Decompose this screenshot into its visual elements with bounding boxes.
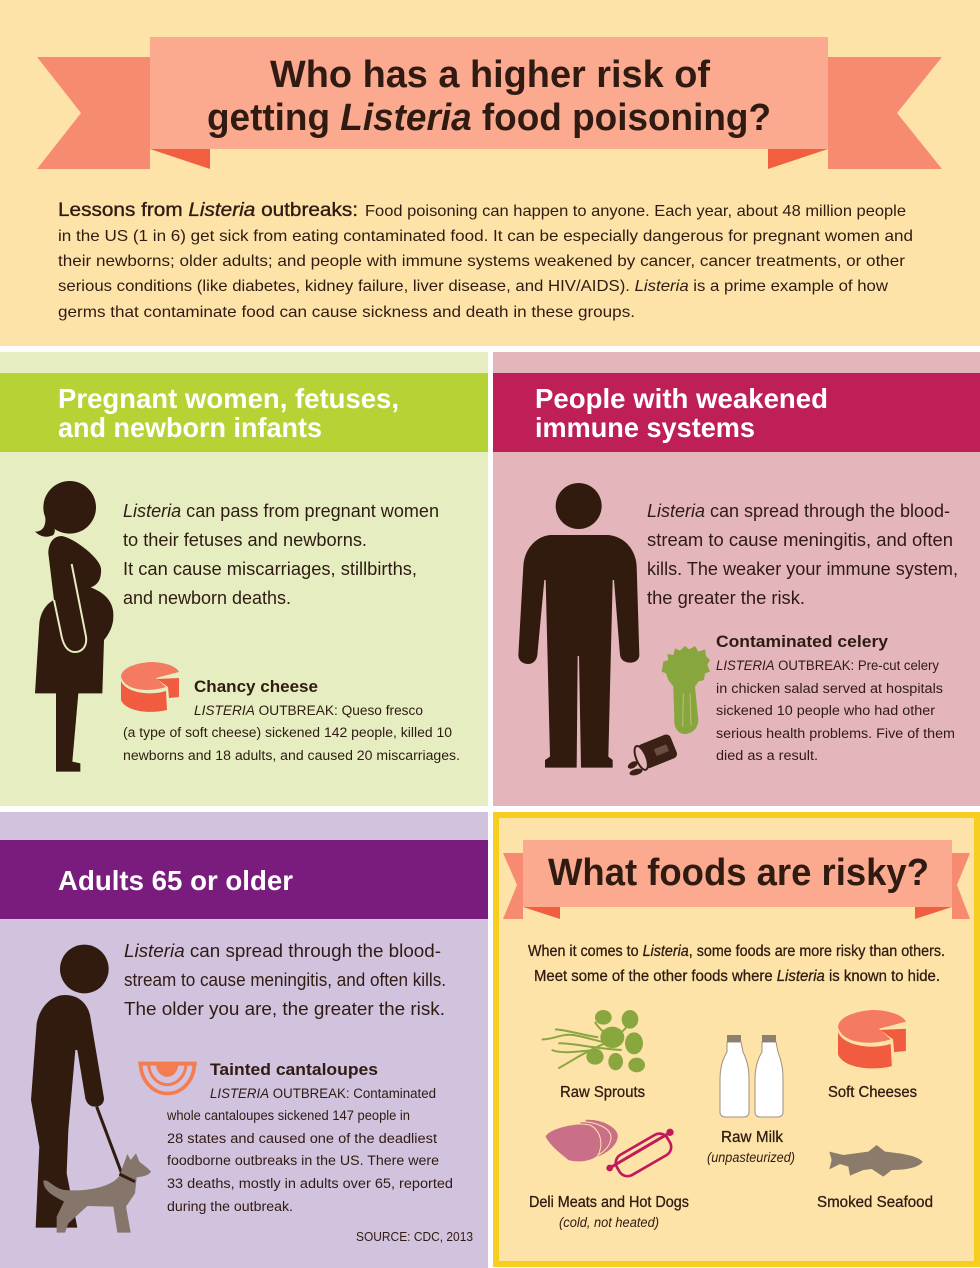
callout: chancy cheese: (a type of soft cheese) sickened 142 people, killed 10 — [123, 725, 452, 740]
text: foods intro — [528, 943, 945, 985]
food: soft cheeses — [828, 1010, 917, 1101]
heading: pregnant women: Pregnant women, fetuses, — [58, 383, 399, 414]
text: older adult risk: The older you are, the greater the risk. — [124, 999, 445, 1019]
panel: weakened immune systems — [493, 352, 980, 806]
callout: tainted cantaloupes: whole cantaloupes sickened 147 people in — [166, 1108, 410, 1123]
callout: tainted cantaloupes: during the outbreak. — [167, 1199, 293, 1214]
callout: tainted cantaloupes: Tainted cantaloupes — [210, 1060, 378, 1079]
heading: immune systems: immune systems — [535, 412, 755, 443]
food: deli meats and hot dogs — [529, 1119, 689, 1230]
text: older adult risk: Listeria can spread through the blood- — [124, 941, 441, 961]
heading: adults: Adults 65 or older — [58, 865, 293, 896]
intro text: Lessons from Listeria outbreaks: — [58, 200, 358, 221]
callout: contaminated celery: Contaminated celery — [716, 632, 889, 651]
callout: contaminated celery: sickened 10 people who had other — [716, 703, 936, 718]
food: deli meats and hot dogs: Deli Meats and Hot Dogs — [529, 1194, 689, 1211]
text: pregnant risk: to their fetuses and newborns. — [123, 530, 367, 550]
intro text — [58, 200, 913, 321]
callout: tainted cantaloupes: foodborne outbreaks in the US. There were — [167, 1153, 439, 1168]
food: raw sprouts — [542, 1010, 645, 1101]
food: smoked seafood — [817, 1145, 933, 1211]
banner: what foods are risky — [503, 840, 970, 919]
banner: what foods are risky: What foods are risky? — [548, 852, 929, 894]
food: smoked seafood: Smoked Seafood — [817, 1194, 933, 1211]
food: raw milk — [707, 1035, 795, 1165]
intro text: serious conditions (like diabetes, kidney failure, liver disease, and HIV/AIDS). Listeria is a prime example of how — [58, 278, 888, 295]
callout: contaminated celery: serious health problems. Five of them — [716, 726, 955, 741]
callout: chancy cheese: LISTERIA OUTBREAK: Queso fresco — [194, 703, 423, 718]
food: raw milk: (unpasteurized) — [707, 1150, 795, 1165]
icon: cheese — [121, 662, 179, 712]
intro text: germs that contaminate food can cause sickness and death in these groups. — [58, 304, 635, 321]
icon: pill bottle — [627, 733, 678, 777]
text: foods intro: When it comes to Listeria, some foods are more risky than others. — [528, 943, 945, 960]
food: deli meats and hot dogs: (cold, not heated) — [559, 1215, 659, 1230]
heading: immune systems — [535, 383, 828, 443]
food: raw sprouts: Raw Sprouts — [560, 1084, 645, 1101]
icon: celery — [662, 646, 710, 734]
heading: pregnant women: and newborn infants — [58, 412, 322, 443]
panel: pregnant women — [0, 352, 488, 806]
callout: chancy cheese — [123, 677, 460, 763]
callout: contaminated celery: died as a result. — [716, 748, 818, 763]
icon: pregnant woman — [35, 481, 113, 772]
callout: tainted cantaloupes — [166, 1060, 453, 1214]
panel: adults 65 or older — [0, 812, 488, 1268]
intro text: in the US (1 in 6) get sick from eating contaminated food. It can be especially dangerous for pregnant women and — [58, 228, 913, 245]
icon: older adult with dog — [31, 945, 151, 1233]
text: pregnant risk — [123, 501, 439, 608]
panel: introduction — [0, 0, 980, 346]
title: getting Listeria food poisoning? — [207, 97, 771, 139]
text: older adult risk — [124, 941, 446, 1019]
text: older adult risk: stream to cause meningitis, and often kills. — [124, 970, 446, 990]
title — [207, 54, 771, 139]
text: pregnant risk: Listeria can pass from pregnant women — [123, 501, 439, 521]
callout: tainted cantaloupes: LISTERIA OUTBREAK: Contaminated — [210, 1086, 436, 1101]
text: immune risk: kills. The weaker your immune system, — [647, 559, 958, 579]
title: Who has a higher risk of — [270, 54, 710, 96]
callout: chancy cheese: newborns and 18 adults, and caused 20 miscarriages. — [123, 748, 460, 763]
intro text: their newborns; older adults; and people with immune systems weakened by cancer, cancer treatments, or other — [58, 253, 906, 270]
callout: contaminated celery: LISTERIA OUTBREAK: Pre-cut celery — [716, 658, 939, 673]
text: pregnant risk: and newborn deaths. — [123, 588, 291, 608]
callout: tainted cantaloupes: 33 deaths, mostly in adults over 65, reported — [167, 1176, 453, 1191]
panel: risky foods — [493, 810, 980, 1268]
text: immune risk: Listeria can spread through the blood- — [647, 501, 950, 521]
title banner — [37, 37, 942, 169]
source: SOURCE: CDC, 2013 — [356, 1230, 473, 1244]
food: raw milk: Raw Milk — [721, 1129, 784, 1146]
text: pregnant risk: It can cause miscarriages, stillbirths, — [123, 559, 417, 579]
text: immune risk: stream to cause meningitis, and often — [647, 530, 953, 550]
icon: person — [518, 483, 639, 768]
callout: tainted cantaloupes: 28 states and caused one of the deadliest — [167, 1131, 437, 1146]
heading: pregnant women — [58, 383, 399, 443]
icon: cantaloupe — [138, 1063, 197, 1094]
callout: chancy cheese: Chancy cheese — [194, 677, 318, 696]
text: immune risk — [647, 501, 958, 608]
intro text: Food poisoning can happen to anyone. Each year, about 48 million people — [365, 203, 906, 220]
text: immune risk: the greater the risk. — [647, 588, 805, 608]
heading: immune systems: People with weakened — [535, 383, 828, 414]
text: foods intro: Meet some of the other foods where Listeria is known to hide. — [534, 968, 940, 985]
callout: contaminated celery — [716, 632, 955, 763]
callout: contaminated celery: in chicken salad served at hospitals — [716, 681, 943, 696]
food: soft cheeses: Soft Cheeses — [828, 1084, 917, 1101]
